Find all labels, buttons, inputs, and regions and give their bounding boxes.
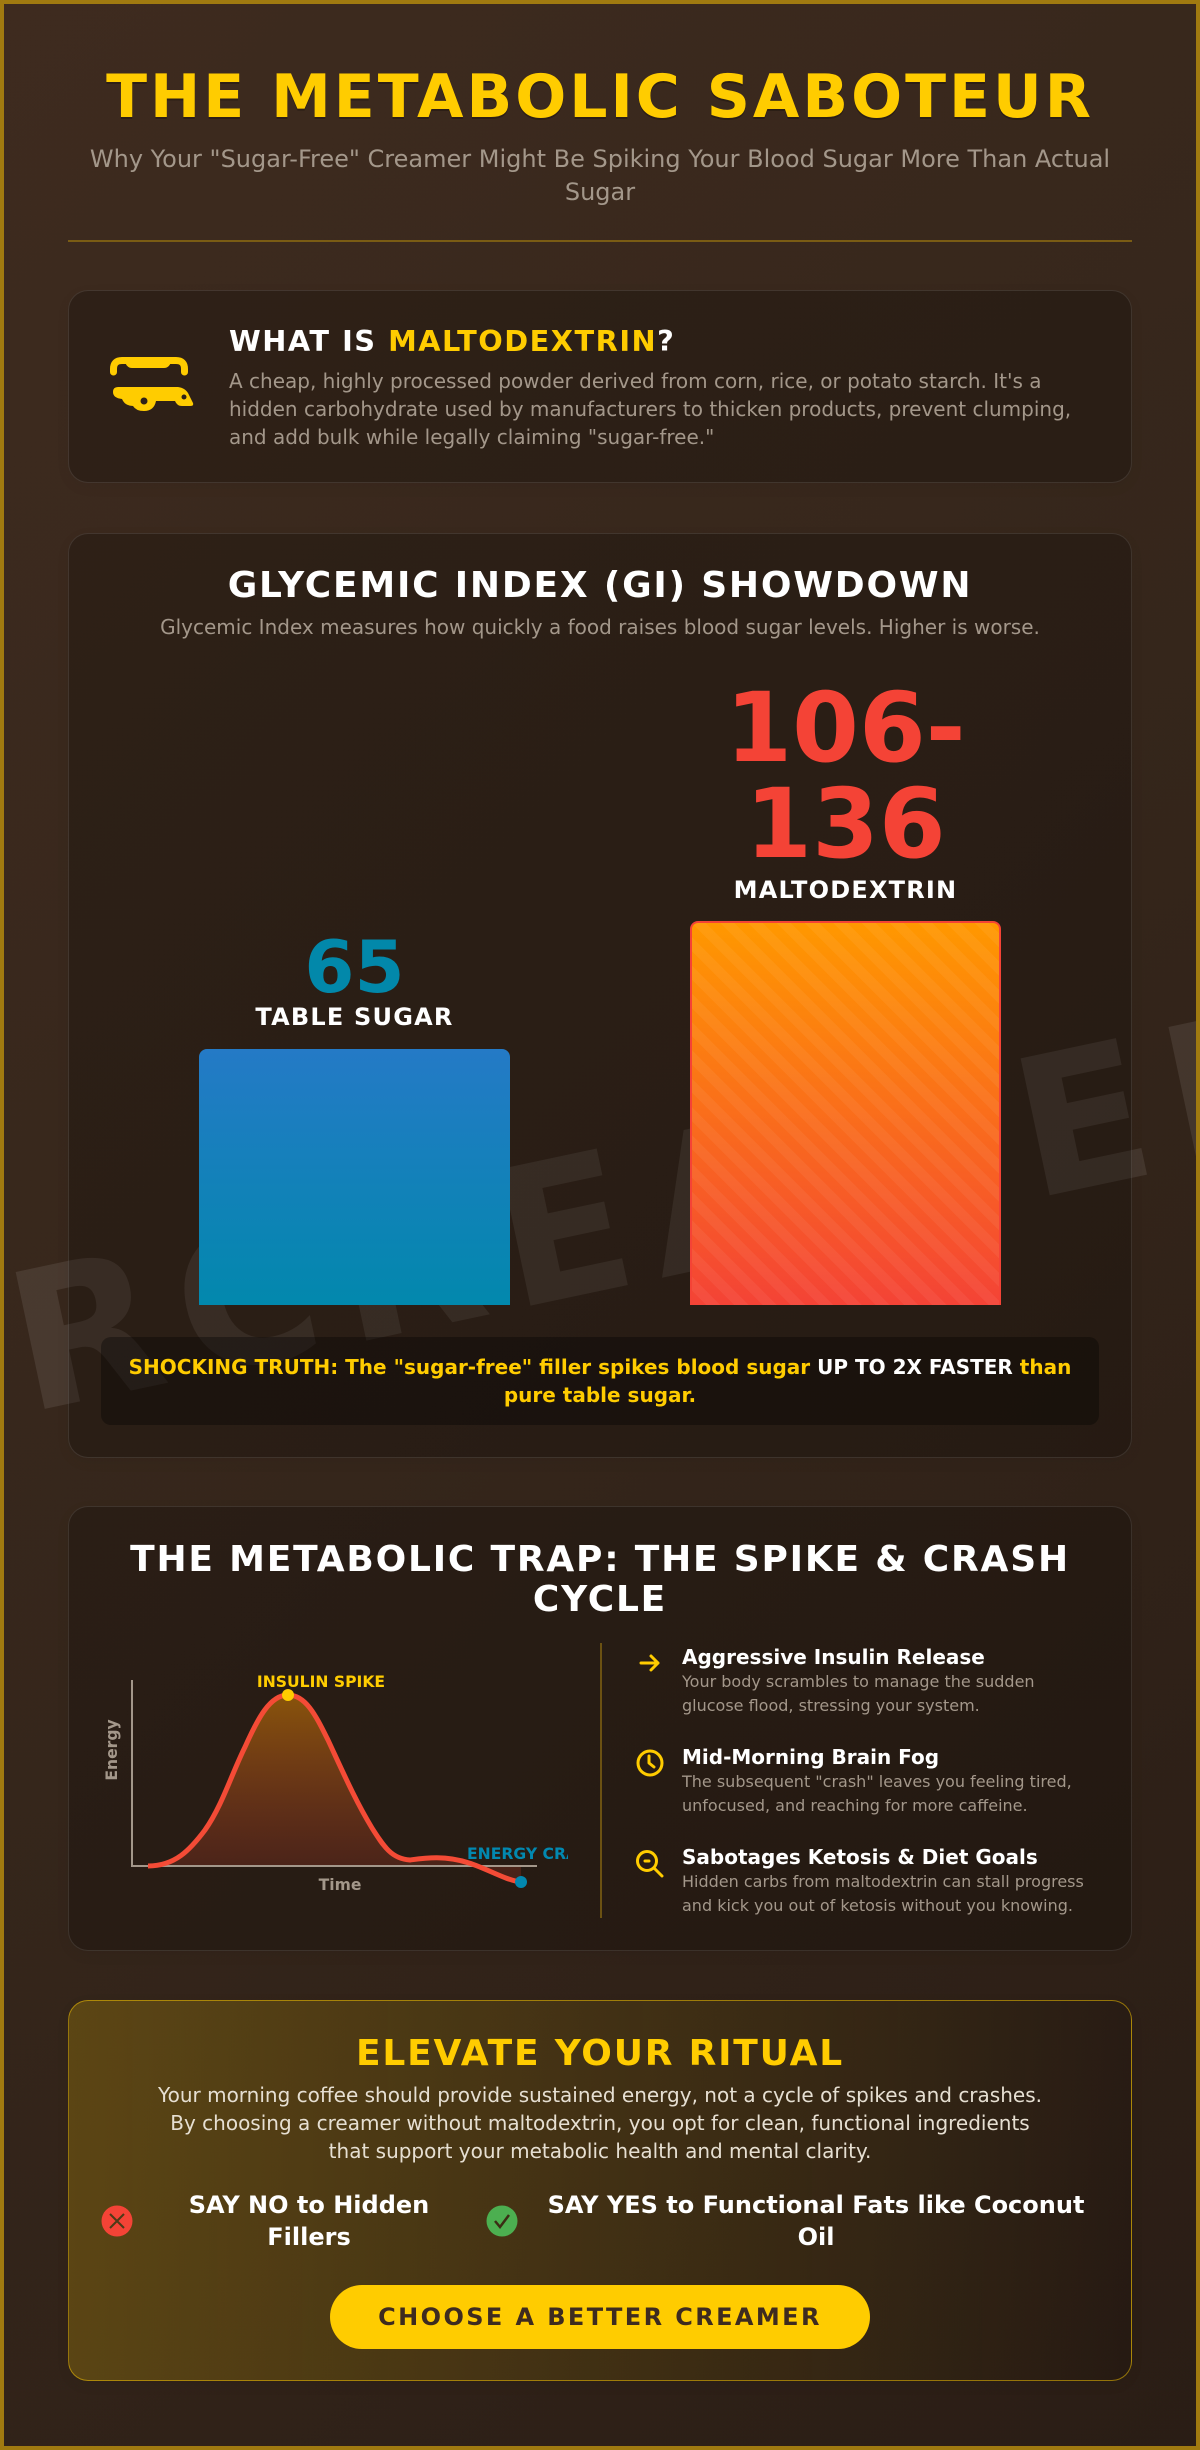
body text: that support your metabolic health and mental clarity. xyxy=(329,2139,871,2163)
say yes: SAY YES to Functional Fats like Coconut xyxy=(548,2191,1084,2219)
icon: yes xyxy=(486,2206,518,2236)
value: 106- xyxy=(725,672,966,784)
icon: magnifier xyxy=(636,1850,664,1878)
description: hidden carbohydrate used by manufacturers to thicken products, prevent clumping, xyxy=(229,397,1071,421)
heading: ELEVATE YOUR RITUAL xyxy=(356,2033,844,2074)
item text: Your body scrambles to manage the sudden xyxy=(682,1672,1035,1691)
callout text xyxy=(129,1355,1071,1407)
column: maltodextrin xyxy=(690,672,1001,1305)
description: A cheap, highly processed powder derived from corn, rice, or potato starch. It's a xyxy=(229,369,1042,393)
item text xyxy=(682,1772,1072,1815)
subtitle: Sugar xyxy=(565,178,635,206)
subtitle xyxy=(90,145,1110,206)
bar xyxy=(199,1049,510,1305)
item: ketosis xyxy=(636,1845,1084,1915)
say yes xyxy=(548,2191,1084,2251)
item: brain fog xyxy=(636,1745,1072,1815)
body text: Your morning coffee should provide sustained energy, not a cycle of spikes and crashes. xyxy=(158,2083,1042,2107)
value xyxy=(725,672,966,880)
panel: metabolic trap xyxy=(68,1506,1132,1951)
marker: peak xyxy=(282,1689,294,1701)
item text: Hidden carbs from maltodextrin can stall progress xyxy=(682,1872,1084,1891)
label: MALTODEXTRIN xyxy=(734,876,957,904)
marker: crash xyxy=(515,1876,527,1888)
value: 136 xyxy=(745,768,946,880)
icon: clock xyxy=(636,1750,664,1776)
axes xyxy=(132,1680,537,1866)
say no: SAY NO to Hidden xyxy=(189,2191,429,2219)
item text: The subsequent "crash" leaves you feeling tired, xyxy=(682,1772,1072,1791)
list: effects xyxy=(636,1645,1084,1915)
header divider xyxy=(68,240,1132,242)
panel: what is maltodextrin xyxy=(68,290,1132,483)
item heading: Sabotages Ketosis & Diet Goals xyxy=(682,1845,1038,1869)
callout text: SHOCKING TRUTH: The "sugar-free" filler spikes blood sugar UP TO 2X FASTER than xyxy=(129,1355,1071,1379)
description: and add bulk while legally claiming "sugar-free." xyxy=(229,425,714,449)
body text xyxy=(158,2083,1042,2163)
area under curve xyxy=(148,1695,521,1882)
say yes: Oil xyxy=(798,2223,834,2251)
heading: WHAT IS MALTODEXTRIN? xyxy=(229,324,675,358)
subtitle: Why Your "Sugar-Free" Creamer Might Be Spiking Your Blood Sugar More Than Actual xyxy=(90,145,1110,173)
button xyxy=(330,2285,870,2349)
item heading: Aggressive Insulin Release xyxy=(682,1645,985,1669)
label: TABLE SUGAR xyxy=(255,1003,454,1031)
subheading: Glycemic Index measures how quickly a food raises blood sugar levels. Higher is worse. xyxy=(160,615,1040,639)
button: CHOOSE A BETTER CREAMER xyxy=(378,2303,822,2331)
label: insulin spike: INSULIN SPIKE xyxy=(257,1673,385,1691)
label: time axis: Time xyxy=(319,1876,361,1894)
item heading: Mid-Morning Brain Fog xyxy=(682,1745,939,1769)
description xyxy=(229,369,1071,449)
callout text: pure table sugar. xyxy=(504,1383,696,1407)
body text: By choosing a creamer without maltodextrin, you opt for clean, functional ingredients xyxy=(170,2111,1030,2135)
item text xyxy=(682,1872,1084,1915)
heading xyxy=(130,1539,1070,1620)
item text: unfocused, and reaching for more caffeine. xyxy=(682,1796,1028,1815)
heading: CYCLE xyxy=(533,1579,667,1620)
chart: spike and crash curve xyxy=(103,1673,568,1894)
callout: shocking truth xyxy=(101,1337,1099,1425)
icon: maltodextrin powder xyxy=(110,357,194,411)
bar xyxy=(690,921,1001,1305)
item text: and kick you out of ketosis without you knowing. xyxy=(682,1896,1073,1915)
say no xyxy=(189,2191,429,2251)
panel: elevate your ritual xyxy=(68,2000,1132,2381)
label: energy axis: Energy xyxy=(103,1719,121,1781)
say no: Fillers xyxy=(267,2223,351,2251)
icon: no xyxy=(102,2206,132,2236)
icon: arrow xyxy=(640,1654,660,1672)
chart and list divider xyxy=(600,1643,602,1918)
value: 65 xyxy=(304,925,405,1009)
title: THE METABOLIC SABOTEUR xyxy=(106,62,1094,132)
item text xyxy=(682,1672,1035,1715)
item: insulin release xyxy=(640,1645,1035,1715)
item text: glucose flood, stressing your system. xyxy=(682,1696,980,1715)
panel: glycemic index showdown xyxy=(68,533,1132,1458)
heading: GLYCEMIC INDEX (GI) SHOWDOWN xyxy=(228,565,972,606)
column: table sugar xyxy=(199,925,510,1305)
heading: THE METABOLIC TRAP: THE SPIKE & CRASH xyxy=(130,1539,1070,1580)
curve xyxy=(148,1695,521,1882)
